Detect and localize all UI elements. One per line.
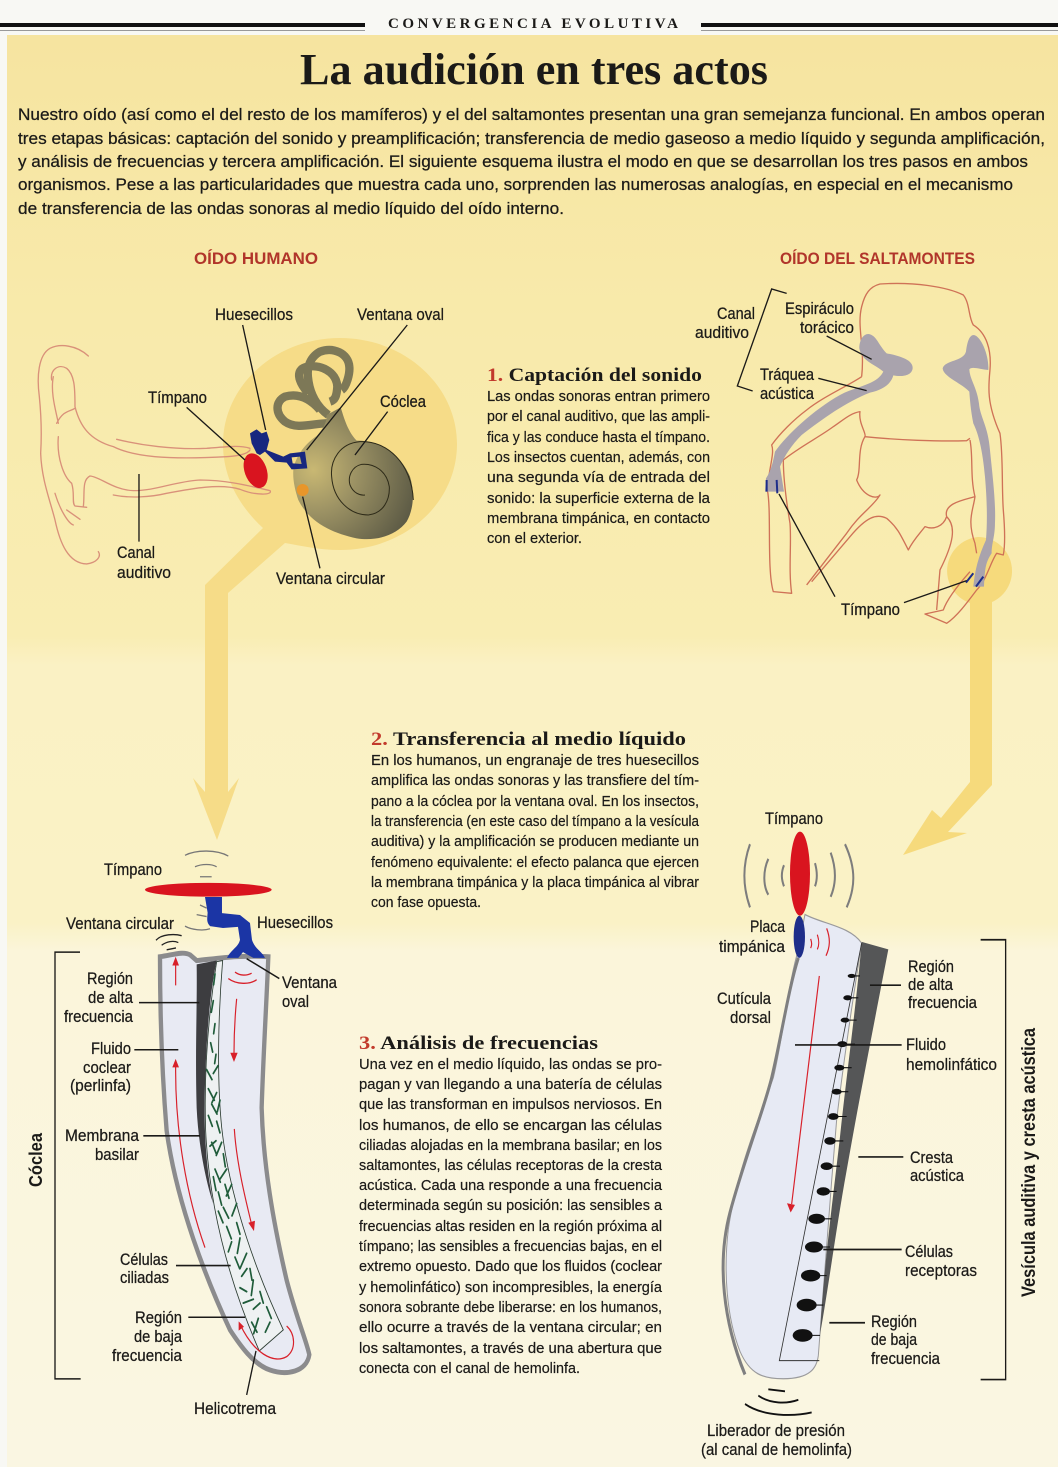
text block: 2. Transferencia al medio líquido: fenómeno equivalente: el efecto palanca que ejercen: [371, 854, 699, 871]
intro text block: organismos. Pese a las particularidades que muestra cada uno, sorprenden las numerosas analogías, en especial en el mecanismo: [18, 176, 1013, 194]
text block: 2. Transferencia al medio líquido: pano a la cóclea por la ventana oval. En los insectos,: [371, 793, 699, 810]
eardrum: [239, 450, 272, 491]
label: Liberador de presión: [701, 1422, 852, 1459]
leader lines: [139, 325, 407, 568]
text block: 3. Análisis de frecuencias: tímpano; las sensibles a frecuencias bajas, en el: [359, 1238, 662, 1255]
text block: 1. Captación del sonido: [487, 365, 711, 547]
label: Ventana circular: Ventana circular: [276, 570, 385, 588]
text block: 3. Análisis de frecuencias: 3. Análisis de frecuencias: [359, 1033, 598, 1054]
label: Fluido coclear: (perlinfa): [70, 1077, 131, 1095]
label: Fluido hemolinfático: [906, 1036, 997, 1074]
sound waves: [744, 844, 853, 907]
acoustic crest: [779, 943, 862, 1361]
arrow: yellow arrow from human ear to cochlea: [193, 338, 457, 840]
label: Cóclea vertical: Cóclea: [26, 1132, 46, 1187]
text block: 3. Análisis de frecuencias: saltamontes, las células receptoras de la cresta: [359, 1157, 663, 1174]
label: Ventana circular (cochlea): Ventana circular: [66, 915, 174, 933]
label: Canal auditivo (insect): [695, 305, 755, 342]
body outline: [767, 283, 1005, 623]
label: Células receptoras: Células: [905, 1243, 953, 1261]
label: Región de baja frecuencia (vesicle): [871, 1313, 941, 1368]
label: Liberador de presión: (al canal de hemolinfa): [701, 1441, 852, 1459]
eardrum: [145, 883, 272, 897]
label: Cresta acústica: [910, 1149, 965, 1185]
label: Región de alta frecuencia (cochlea): de alta: [88, 989, 134, 1007]
label: Fluido coclear: coclear: [83, 1059, 131, 1077]
label: Cutícula dorsal: Cutícula: [717, 990, 772, 1008]
section header: Convergencia evolutiva: [0, 16, 1058, 32]
label: Células ciliadas: Células: [120, 1251, 168, 1269]
arrow: yellow arrow from insect ear to vesicle: [903, 537, 1012, 855]
label: Placa timpánica: Placa: [750, 918, 786, 936]
text block: 1. Captación del sonido: una segunda vía de entrada del: [487, 469, 710, 486]
label: Huesecillos (cochlea): Huesecillos: [257, 914, 333, 932]
text block: 3. Análisis de frecuencias: determinada según su posición: las sensibles a: [359, 1197, 663, 1214]
text block: 2. Transferencia al medio líquido: la transferencia (en este caso del tímpano a la vesícula: [371, 813, 700, 830]
label: Tímpano (vesicle): Tímpano: [765, 810, 823, 828]
text block: 2. Transferencia al medio líquido: la membrana timpánica y la placa timpánica al vibrar: [371, 874, 699, 891]
label: Tímpano: Tímpano: [148, 389, 207, 407]
dorsal cuticle: [723, 958, 798, 1375]
label: Ventana oval: Ventana oval: [357, 306, 444, 324]
red pressure arrows: [172, 957, 294, 1359]
label: Región de alta frecuencia (vesicle): [908, 958, 978, 1012]
leader lines and bracket: [55, 952, 279, 1395]
diagram: human cochlea section: [55, 851, 309, 1395]
text block: 1. Captación del sonido: fica y las conduce hasta el tímpano.: [487, 429, 710, 446]
label: Fluido hemolinfático: Fluido: [906, 1036, 946, 1054]
label: Tráquea acústica: [760, 366, 815, 403]
leader lines: [737, 289, 967, 603]
basilar membrane: [205, 961, 283, 1351]
label: Canal auditivo (insect): Canal: [717, 305, 755, 323]
label: Cutícula dorsal: dorsal: [730, 1009, 771, 1027]
label: Espiráculo torácico: [785, 300, 854, 337]
label: Membrana basilar: Membrana: [65, 1127, 140, 1145]
label: Canal auditivo (insect): auditivo: [695, 324, 749, 342]
label: Espiráculo torácico: torácico: [800, 319, 854, 337]
dark wedge: [820, 942, 888, 1335]
text block: 3. Análisis de frecuencias: ello ocurre a través de la ventana circular; en: [359, 1319, 662, 1336]
dark high-frequency wedge: [196, 961, 217, 1204]
label: Placa timpánica: [719, 918, 786, 956]
text block: 1. Captación del sonido: sonido: la superficie externa de la: [487, 490, 711, 507]
text block: 2. Transferencia al medio líquido: 2. Transferencia al medio líquido: [371, 729, 686, 750]
label: Células ciliadas: ciliadas: [120, 1269, 169, 1287]
text block: 1. Captación del sonido: 1. Captación del sonido: [487, 365, 702, 386]
intro text block: [18, 106, 1045, 218]
text block: 3. Análisis de frecuencias: Una vez en el medio líquido, las ondas se pro-: [359, 1056, 662, 1073]
label: Vesícula auditiva y cresta acústica: Vesícula auditiva y cresta acústica: [1019, 1028, 1040, 1297]
label: Región de baja frecuencia (cochlea): de baja: [134, 1328, 183, 1346]
label: Cresta acústica: acústica: [910, 1167, 965, 1185]
semicircular canals: [277, 350, 349, 426]
text block: 3. Análisis de frecuencias: ciliadas alojadas en la membrana basilar; en los: [359, 1137, 662, 1154]
pressure release arcs: [745, 1389, 812, 1415]
label: Región de alta frecuencia (cochlea): Región: [87, 970, 133, 988]
tympana: [767, 480, 983, 587]
ossicles, eardrum and leader lines for human ear: [139, 325, 407, 568]
intro text block: y análisis de frecuencias y tercera amplificación. El siguiente esquema ilustra el modo en que se desarrollan los tres pasos en ambos: [18, 153, 1028, 171]
text block: 3. Análisis de frecuencias: pagan y van llegando a una batería de células: [359, 1076, 662, 1093]
text block: 3. Análisis de frecuencias: extremo opuesto. Dado que los fluidos (coclear: [359, 1258, 662, 1275]
inner ear: canals and cochlea: [277, 350, 413, 539]
label: Fluido hemolinfático: hemolinfático: [906, 1056, 997, 1074]
text block: 1. Captación del sonido: Los insectos cuentan, además, con: [487, 449, 710, 466]
receptor cells: [793, 974, 860, 1342]
text block: 3. Análisis de frecuencias: los saltamontes, a través de una abertura que: [359, 1340, 662, 1357]
text block: 3. Análisis de frecuencias: los humanos, de ello se encargan las células: [359, 1117, 662, 1134]
label: Células receptoras: receptoras: [905, 1262, 977, 1280]
label: Cutícula dorsal: [717, 990, 772, 1027]
label: Placa timpánica: timpánica: [719, 938, 786, 956]
text block: 3. Análisis de frecuencias: que las transforman en impulsos nerviosos. En: [359, 1096, 662, 1113]
label: Espiráculo torácico: Espiráculo: [785, 300, 854, 318]
label: Ventana oval (cochlea): Ventana: [282, 974, 338, 992]
label: Región de baja frecuencia (cochlea): Región: [135, 1309, 182, 1327]
label: Tímpano (insect): Tímpano: [841, 601, 900, 619]
label: Tímpano (cochlea): Tímpano: [104, 861, 162, 879]
heading: oído del saltamontes: OÍDO DEL SALTAMONTES: [780, 249, 975, 268]
ossicles: [205, 897, 265, 958]
label: Canal auditivo: auditivo: [117, 564, 171, 582]
label: Membrana basilar: basilar: [95, 1146, 139, 1164]
text block: 2. Transferencia al medio líquido: En los humanos, un engranaje de tres huesecillos: [371, 752, 699, 769]
text block: 3. Análisis de frecuencias: frecuencias altas residen en la región próxima al: [359, 1218, 662, 1235]
text block: 3. Análisis de frecuencias: [359, 1033, 663, 1377]
intro text block: Nuestro oído (así como el del resto de los mamíferos) y el del saltamontes presentan una gran semejanza funcional. En ambos operan: [18, 106, 1045, 124]
label: Región de baja frecuencia (vesicle): frecuencia: [871, 1350, 941, 1368]
text block: 2. Transferencia al medio líquido: auditiva) y la amplificación se producen mediante un: [371, 833, 699, 850]
text block: 1. Captación del sonido: Las ondas sonoras entran primero: [487, 388, 710, 405]
label: Cóclea: Cóclea: [380, 393, 427, 411]
eardrum: [790, 832, 810, 916]
round window: [297, 484, 309, 496]
text block: 1. Captación del sonido: por el canal auditivo, que las ampli-: [487, 408, 710, 425]
section header: Convergencia evolutiva: CONVERGENCIA EVOLUTIVA: [388, 16, 678, 32]
title: La audición en tres actos: [300, 45, 768, 94]
label: Células ciliadas: [120, 1251, 169, 1287]
text block: 2. Transferencia al medio líquido: [371, 729, 700, 911]
cochlea tube: [160, 953, 309, 1373]
vesicle body: [726, 914, 862, 1379]
diagram: grasshopper auditory vesicle: [723, 832, 1006, 1415]
text block: 3. Análisis de frecuencias: acústica. Cada una responde a una frecuencia: [359, 1177, 663, 1194]
label: Región de alta frecuencia (vesicle): frecuencia: [908, 994, 978, 1012]
label: Región de baja frecuencia (vesicle): Región: [871, 1313, 917, 1331]
text block: 2. Transferencia al medio líquido: con fase opuesta.: [371, 894, 481, 911]
label: Células receptoras: [905, 1243, 977, 1280]
label: Región de alta frecuencia (cochlea): [64, 970, 134, 1026]
acoustic trachea: [765, 334, 995, 587]
label: Región de baja frecuencia (cochlea): frecuencia: [112, 1347, 183, 1365]
label: Tráquea acústica: Tráquea: [760, 366, 815, 384]
tympanal plate: [794, 916, 805, 958]
hair cells: [207, 974, 271, 1334]
diagram: grasshopper ear: [737, 283, 1005, 623]
heading: oído humano: OÍDO HUMANO: [194, 249, 318, 268]
label: Región de alta frecuencia (vesicle): de alta: [908, 976, 954, 994]
ossicles: [250, 429, 307, 469]
diagram: outer ear outline: [38, 346, 270, 564]
label: Canal auditivo: Canal: [117, 544, 155, 562]
label: Membrana basilar: [65, 1127, 140, 1164]
label: Fluido coclear: [70, 1040, 131, 1095]
leader lines and bracket: [795, 940, 1006, 1380]
text block: 3. Análisis de frecuencias: conecta con el canal de hemolinfa.: [359, 1360, 580, 1377]
label: Región de alta frecuencia (vesicle): Región: [908, 958, 954, 976]
label: Liberador de presión: Liberador de presión: [707, 1422, 845, 1440]
label: Ventana oval (cochlea): [282, 974, 338, 1011]
label: Canal auditivo: [117, 544, 171, 582]
cochlea: [293, 407, 413, 539]
label: Región de baja frecuencia (cochlea): [112, 1309, 183, 1365]
label: Huesecillos: Huesecillos: [215, 306, 293, 324]
label: Ventana oval (cochlea): oval: [282, 993, 309, 1011]
text block: 1. Captación del sonido: con el exterior.: [487, 530, 582, 547]
sound waves: [185, 851, 228, 930]
text block: 3. Análisis de frecuencias: sonora sobrante debe liberarse: en los humanos,: [359, 1299, 662, 1316]
red arrow and arcs: [787, 928, 829, 1212]
label: Helicotrema: Helicotrema: [194, 1400, 277, 1418]
intro text block: de transferencia de las ondas sonoras al medio líquido del oído interno.: [18, 200, 564, 218]
label: Fluido coclear: Fluido: [91, 1040, 131, 1058]
text block: 1. Captación del sonido: membrana timpánica, en contacto: [487, 510, 710, 527]
label: Región de alta frecuencia (cochlea): frecuencia: [64, 1008, 134, 1026]
intro text block: tres etapas básicas: captación del sonido y preamplificación; transferencia de medio gaseoso a medio líquido y segunda amplificación,: [18, 130, 1045, 148]
text block: 2. Transferencia al medio líquido: amplifica las ondas sonoras y las transfiere del tím-: [371, 772, 699, 789]
label: Región de baja frecuencia (vesicle): de baja: [871, 1331, 918, 1349]
label: Tráquea acústica: acústica: [760, 385, 815, 403]
label: Cresta acústica: Cresta: [910, 1149, 954, 1167]
text block: 3. Análisis de frecuencias: y hemolinfático) son incompresibles, la energía: [359, 1279, 663, 1296]
